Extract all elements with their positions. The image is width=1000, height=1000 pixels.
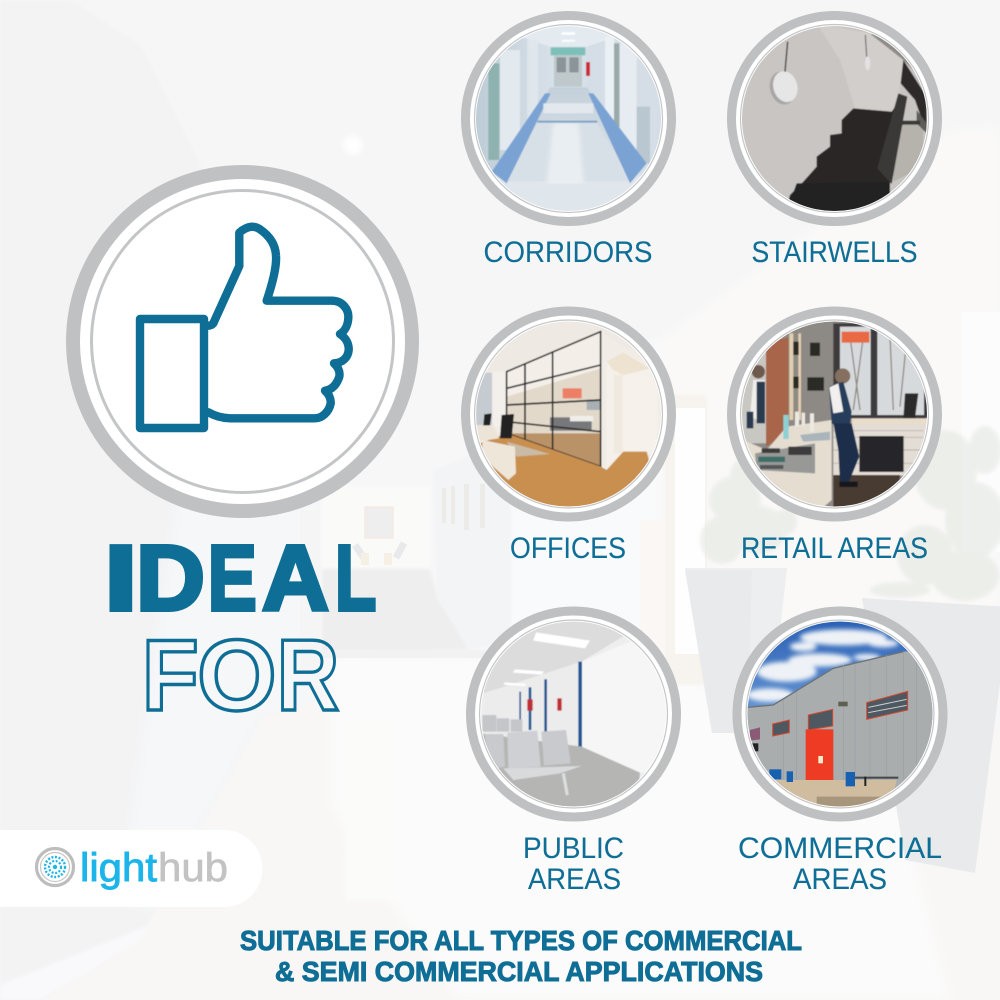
circle: public areas: [470, 611, 676, 817]
label: commercial areas: COMMERCIAL: [738, 832, 942, 865]
circle: offices: [466, 311, 672, 517]
photo: commercial building: [745, 620, 937, 808]
circle: stairwells: [732, 16, 938, 223]
footer caption: [240, 925, 802, 987]
circle: commercial areas: [737, 611, 943, 817]
label: stairwells: STAIRWELLS: [752, 236, 918, 269]
label: retail areas: RETAIL AREAS: [741, 532, 928, 565]
background: corridor end: [300, 440, 510, 670]
photo: public waiting area: [478, 620, 668, 810]
logo wordmark: light: [80, 846, 157, 890]
heading: IDEAL FOR: A: [262, 526, 329, 630]
label: public areas: PUBLIC: [523, 832, 624, 865]
label: commercial areas: [738, 832, 942, 896]
footer caption: SUITABLE FOR ALL TYPES OF COMMERCIAL: [240, 925, 802, 956]
label: commercial areas: AREAS: [793, 863, 887, 896]
background: ceiling light: [340, 132, 366, 158]
photo: glass partition office: [473, 320, 663, 513]
heading: IDEAL FOR: L: [335, 526, 376, 630]
circle: retail areas: [732, 311, 938, 517]
heading: IDEAL FOR: I: [104, 526, 138, 630]
heading: IDEAL FOR: D: [136, 526, 205, 630]
label: corridors: CORRIDORS: [484, 236, 652, 269]
photo: barber shop retail interior: [740, 320, 930, 513]
heading: IDEAL FOR: F: [142, 620, 199, 732]
heading: IDEAL FOR: O: [197, 620, 277, 732]
label: public areas: AREAS: [528, 863, 621, 896]
heading: IDEAL FOR: R: [277, 620, 339, 732]
main badge: thumbs up: [73, 172, 412, 511]
logo wordmark: hub: [158, 846, 228, 890]
logo panel: lighthub: [0, 830, 262, 907]
heading: IDEAL FOR: [104, 526, 376, 732]
circle: corridors: [466, 16, 672, 222]
icon: lighthub lens: [36, 848, 74, 886]
footer caption: & SEMI COMMERCIAL APPLICATIONS: [275, 956, 763, 987]
icon: thumbs up: [140, 227, 349, 428]
background: planters and plants: [685, 426, 1000, 873]
background: windows: [640, 312, 1000, 700]
label: public areas: [523, 832, 624, 896]
photo: stairwell with wall light: [742, 26, 927, 211]
heading: IDEAL FOR: E: [208, 526, 257, 630]
photo: hospital corridor: [476, 26, 661, 211]
label: offices: OFFICES: [510, 532, 626, 565]
